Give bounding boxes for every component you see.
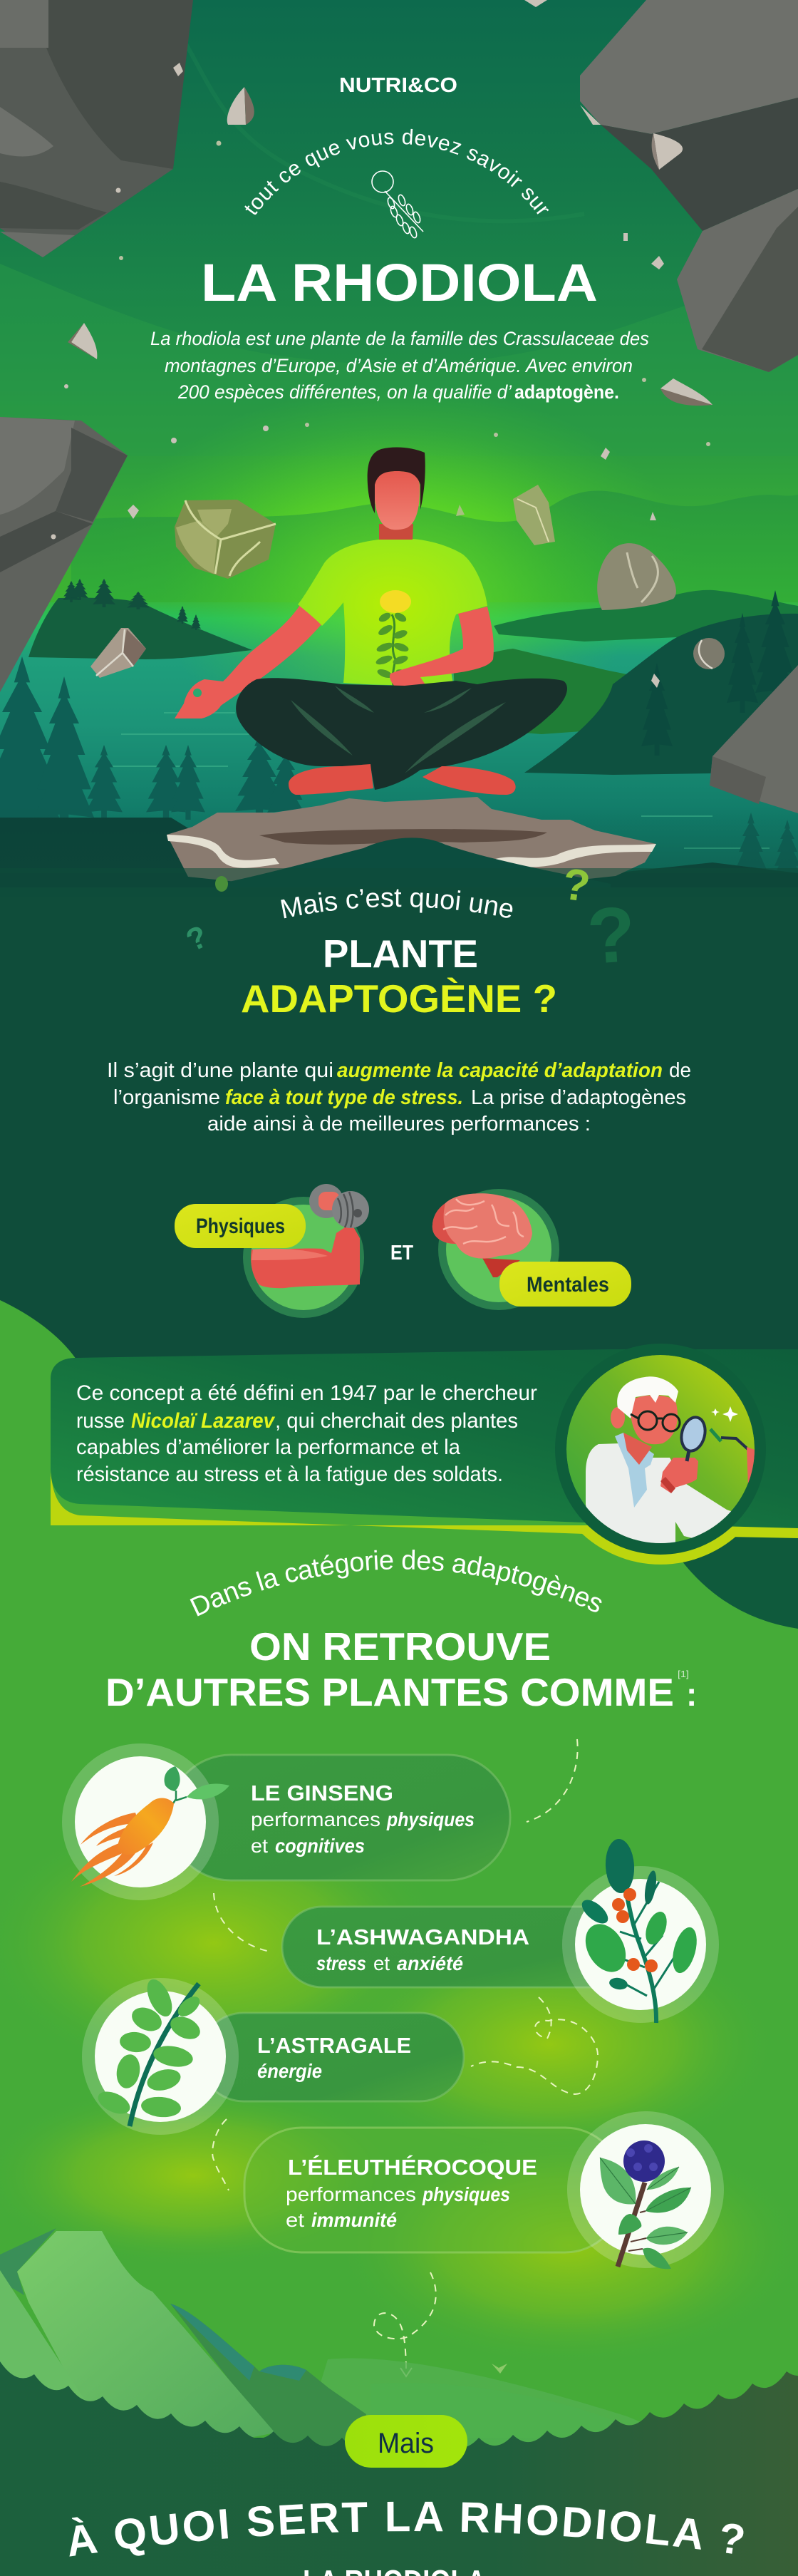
- callout text: Ce concept a été défini en 1947 par le chercheur: [76, 1381, 537, 1405]
- pill: mentales: [499, 1262, 631, 1307]
- intro text: [150, 328, 649, 403]
- icon: astragale plant: [95, 1976, 204, 2126]
- panel: bottom section background with scalloped edge: [0, 2359, 798, 2576]
- heading: on retrouve: [105, 1624, 697, 1714]
- card: eleutherocoque: L’ÉLEUTHÉROCOQUE: [288, 2155, 537, 2180]
- card: ashwagandha: [282, 1838, 719, 2023]
- card: ginseng: [62, 1743, 510, 1900]
- heading: plante adaptogène: ADAPTOGÈNE ?: [241, 977, 557, 1021]
- heading: on retrouve: :: [686, 1676, 697, 1713]
- title: LA RHODIOLA: [201, 253, 598, 312]
- heading: à quoi sert la rhodiola: À QUOI SERT LA RHODIOLA ?: [70, 2502, 744, 2557]
- callout text: russe: [76, 1409, 125, 1433]
- card: astragale: L’ASTRAGALE: [257, 2033, 411, 2058]
- card: ashwagandha: stress: [316, 1952, 366, 1974]
- feet: [289, 764, 373, 795]
- callout text: , qui cherchait des plantes: [275, 1409, 518, 1433]
- shirt: [298, 539, 487, 685]
- connector text: et: ET: [390, 1242, 413, 1264]
- icon: question marks: ?: [584, 890, 638, 981]
- card: eleutherocoque: immunité: [311, 2209, 397, 2231]
- arms: [175, 605, 322, 718]
- panel: green section background: [0, 1300, 798, 2438]
- illustration: floating rocks: [90, 485, 725, 678]
- card: eleutherocoque: performances: [286, 2183, 416, 2205]
- explanation text: Il s’agit d’une plante qui: [107, 1059, 333, 1082]
- pill: physiques: Physiques: [196, 1215, 285, 1238]
- heading: on retrouve: [1]: [678, 1669, 689, 1679]
- icon: brain: [432, 1189, 559, 1310]
- card: ginseng: cognitives: [275, 1835, 365, 1857]
- card: ginseng: physiques: [386, 1808, 475, 1830]
- icon: ashwagandha plant: [577, 1838, 701, 2023]
- icon: question marks: ?: [559, 860, 593, 912]
- panel: Lazarev callout: [51, 1344, 798, 1629]
- illustration: lake shore hills and forest: [0, 579, 798, 891]
- intro text: montagnes d’Europe, d’Asie et d’Amérique. Avec environ: [165, 355, 633, 376]
- curved heading: Mais c’est quoi une: [281, 889, 513, 918]
- callout text: capables d’améliorer la performance et la: [76, 1436, 460, 1459]
- illustration: meditating man: [167, 448, 656, 891]
- panel: adaptogen section background: [0, 868, 798, 1600]
- card: eleutherocoque: et: [286, 2209, 304, 2231]
- icon: muscle arm with dumbbell: [243, 1184, 369, 1318]
- card: ashwagandha: et: [373, 1952, 390, 1974]
- card: ashwagandha: L’ASHWAGANDHA: [316, 1925, 529, 1949]
- explanation text: aide ainsi à de meilleures performances :: [207, 1113, 591, 1135]
- logo: NUTRI&CO: [339, 74, 457, 97]
- icon: question marks: [181, 860, 638, 981]
- heading: plante adaptogène: [241, 932, 557, 1021]
- intro text: adaptogène.: [514, 381, 619, 403]
- explanation text: augmente la capacité d’adaptation: [337, 1059, 663, 1082]
- card: eleutherocoque: physiques: [422, 2183, 510, 2205]
- icon: rhodiola plant outline: [372, 171, 423, 239]
- explanation text: de: [669, 1059, 691, 1082]
- icon: eleutherococcus plant: [600, 2140, 691, 2269]
- heading: plante adaptogène: PLANTE: [323, 932, 478, 976]
- callout text: [76, 1381, 537, 1486]
- icon: ginseng root: [71, 1766, 229, 1887]
- illustration: green mountains: [0, 2228, 712, 2452]
- dashed connectors: [212, 1739, 598, 2376]
- card: astragale: énergie: [257, 2060, 322, 2082]
- pill: mais: Mais: [378, 2428, 434, 2459]
- panel: hero scene background: [0, 0, 798, 873]
- illustration: cliffs: [0, 0, 798, 813]
- explanation text: l’organisme: [113, 1086, 220, 1109]
- illustration: rock chips: [51, 0, 712, 688]
- heading: on retrouve: ON RETROUVE: [249, 1624, 551, 1669]
- curved heading: categorie: Dans la catégorie des adaptogènes: [190, 1550, 601, 1617]
- card: ashwagandha: anxiété: [397, 1952, 463, 1974]
- pill: mentales: Mentales: [527, 1273, 609, 1297]
- card: eleutherocoque: [244, 2111, 724, 2269]
- explanation text: [107, 1059, 691, 1135]
- explanation text: La prise d’adaptogènes: [471, 1086, 686, 1109]
- card: astragale: [82, 1976, 464, 2135]
- curved subtitle: tout ce que vous devez savoir sur: [244, 128, 549, 215]
- glowing sprig: [375, 590, 411, 686]
- heading: on retrouve: D’AUTRES PLANTES COMME: [105, 1670, 674, 1714]
- illustration: scientist with magnifier: [566, 1355, 757, 1547]
- card: ginseng: et: [251, 1835, 268, 1857]
- icon: question marks: ?: [181, 919, 213, 959]
- explanation text: face à tout type de stress.: [225, 1086, 463, 1109]
- intro text: La rhodiola est une plante de la famille des Crassulaceae des: [150, 328, 649, 349]
- pill: physiques: [175, 1204, 306, 1248]
- card: ginseng: LE GINSENG: [251, 1781, 393, 1805]
- card: ginseng: performances: [251, 1808, 380, 1830]
- callout text: résistance au stress et à la fatigue des soldats.: [76, 1463, 503, 1486]
- callout text: Nicolaï Lazarev: [131, 1409, 276, 1433]
- neck and head: [379, 524, 413, 540]
- intro text: 200 espèces différentes, on la qualifie d’: [177, 381, 512, 403]
- pill: mais: [345, 2415, 467, 2468]
- legs: [236, 678, 567, 790]
